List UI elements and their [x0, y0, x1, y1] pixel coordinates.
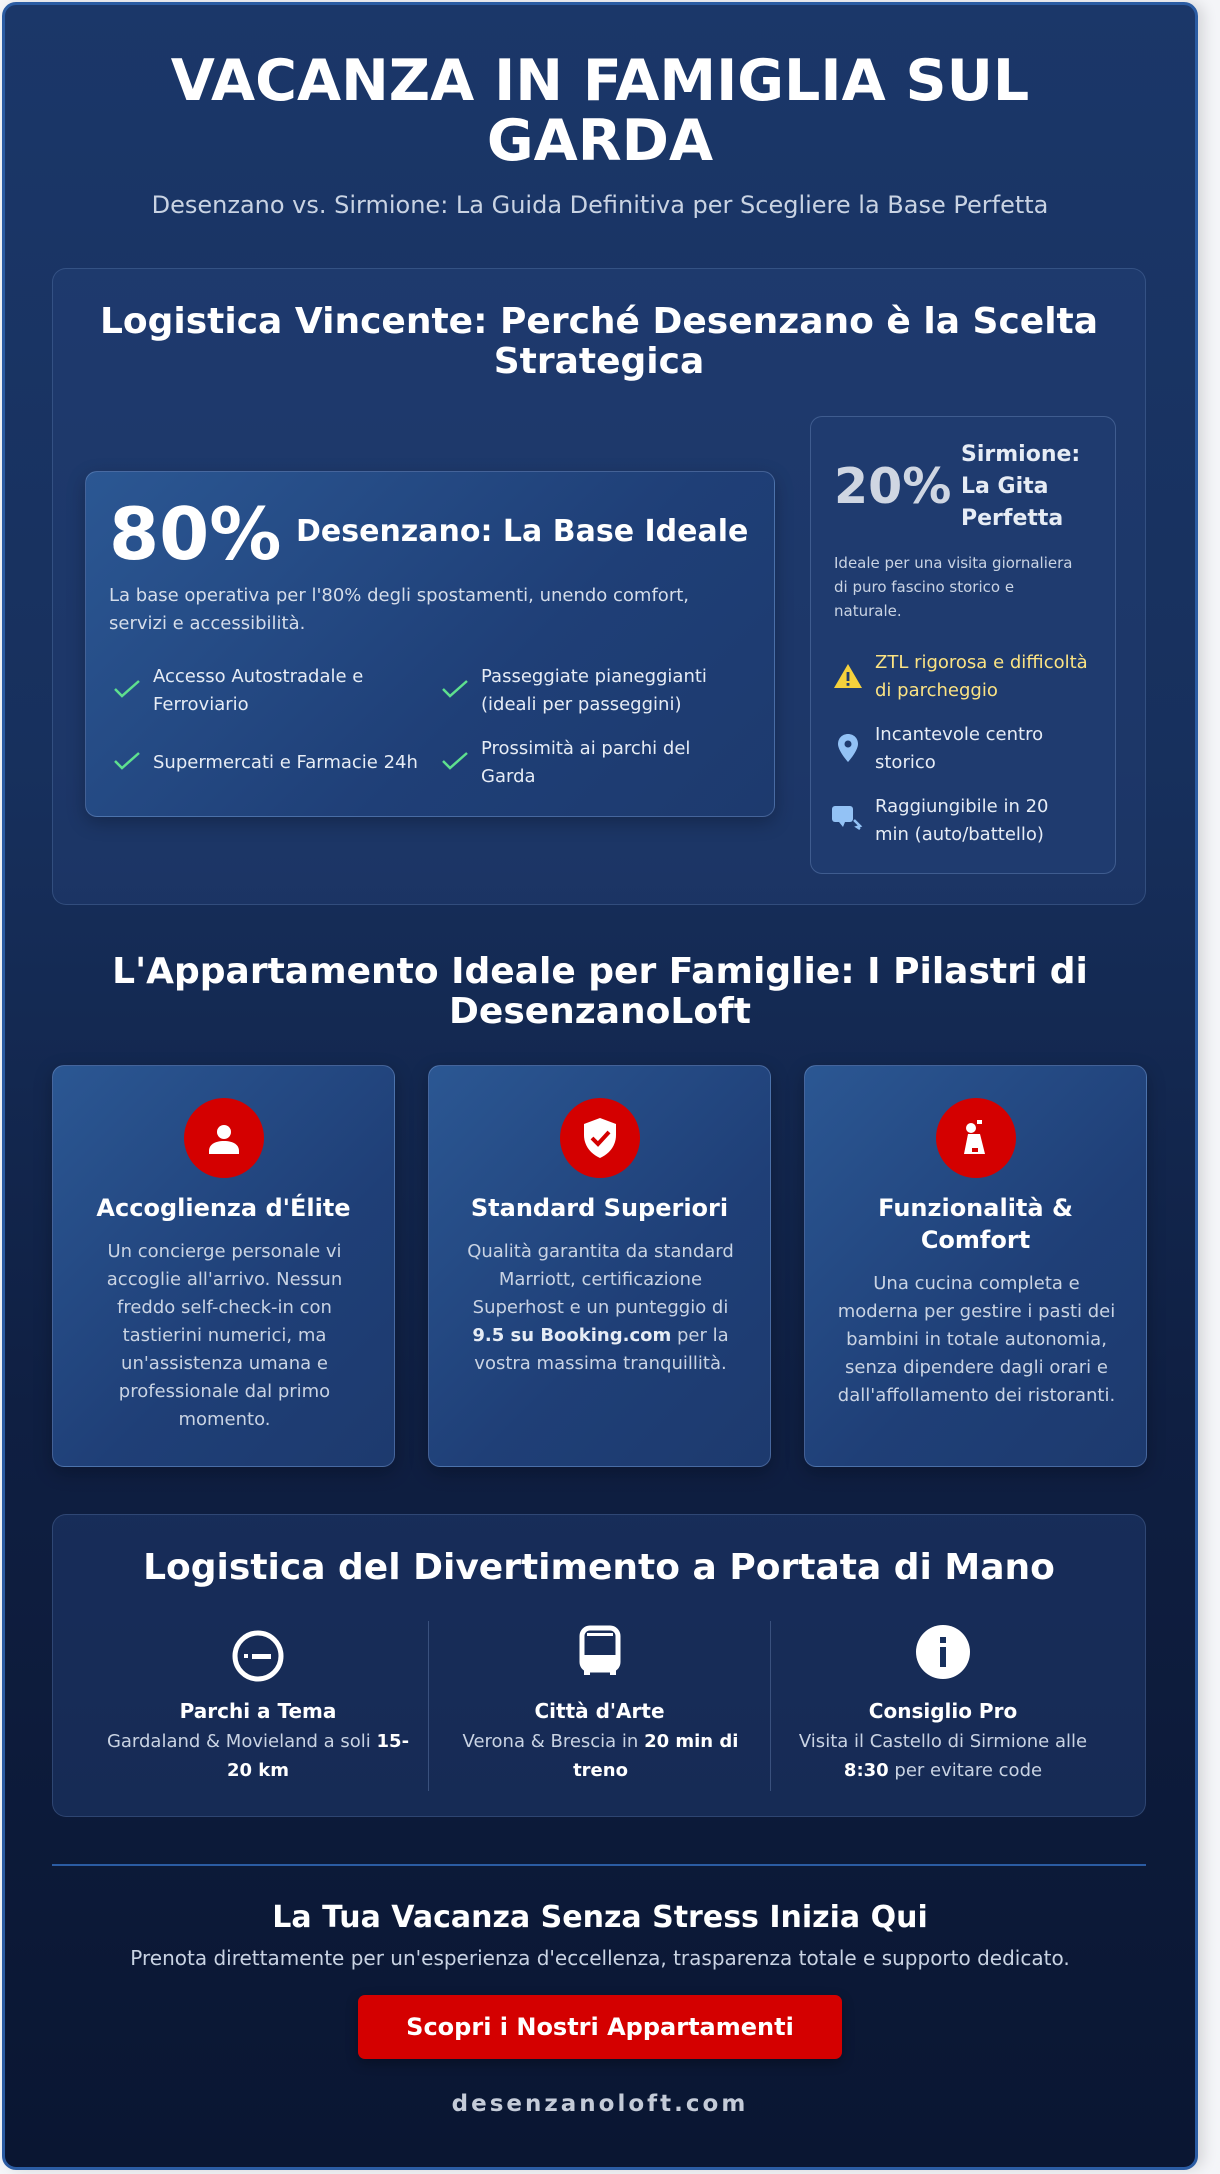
icon: train	[580, 1626, 620, 1675]
card: standard superiori	[428, 1065, 771, 1467]
heading: logistica vincente: Strategica	[494, 341, 704, 382]
panel: logistica divertimento	[52, 1514, 1146, 1817]
card text: Un concierge personale vi accoglie all'arrivo. Nessun freddo self-check-in con tastierini numerici, ma un'assistenza umana e professionale dal primo momento.	[107, 1241, 342, 1430]
card: desenzano 80%	[85, 471, 775, 817]
check item 1: Ferroviario	[153, 694, 249, 715]
column: città	[428, 1621, 771, 1791]
item: centro storico: storico	[875, 752, 936, 773]
checklist	[114, 666, 707, 787]
title: VACANZA IN FAMIGLIA SUL	[171, 48, 1029, 114]
item: centro storico: Incantevole centro	[875, 724, 1043, 745]
check item 2: (ideali per passeggini)	[481, 694, 681, 715]
item: ZTL warning	[834, 652, 1088, 701]
heading: pilastri	[112, 951, 1088, 1032]
title: Consiglio Pro	[869, 1699, 1017, 1723]
check item 4	[442, 738, 690, 787]
check item 2	[442, 666, 707, 715]
card title: sirmione	[961, 442, 1080, 531]
item: raggiungibile: Raggiungibile in 20	[875, 796, 1048, 817]
column: consiglio	[799, 1625, 1087, 1781]
CTA text: Prenota direttamente per un'esperienza d'eccellenza, trasparenza totale e supporto dedicato.	[130, 1946, 1070, 1970]
description: servizi e accessibilità.	[109, 613, 305, 634]
title	[171, 48, 1029, 174]
card title: Funzionalità &	[878, 1194, 1073, 1222]
item: centro storico	[838, 724, 1043, 773]
check item 1: Accesso Autostradale e	[153, 666, 363, 687]
list: sirmione points	[832, 652, 1088, 845]
check item 3: Supermercati e Farmacie 24h	[153, 752, 418, 773]
title: Parchi a Tema	[180, 1699, 336, 1723]
card text: Qualità garantita da standard Marriott, certificazione Superhost e un punteggio di 9.5 su Booking.com per la vostra massima tranquillità.	[467, 1241, 734, 1374]
item: raggiungibile: min (auto/battello)	[875, 824, 1044, 845]
card title: Comfort	[921, 1226, 1030, 1254]
footer url: desenzanoloft.com	[452, 2091, 748, 2117]
stat: 80%: 80%	[109, 492, 281, 576]
card title: sirmione: Sirmione:	[961, 442, 1080, 467]
check item 4: Garda	[481, 766, 536, 787]
icon: chef	[936, 1098, 1016, 1178]
stat: 20%: 20%	[834, 458, 951, 515]
icon: park	[232, 1630, 284, 1682]
card: sirmione 20%	[810, 416, 1116, 874]
check item 2: Passeggiate pianeggianti	[481, 666, 707, 687]
check item 1	[114, 666, 363, 715]
check item 4: Prossimità ai parchi del	[481, 738, 690, 759]
panel: logistica vincente	[52, 268, 1146, 905]
icon: person	[184, 1098, 264, 1178]
icon: info	[916, 1625, 970, 1679]
subtitle: Desenzano vs. Sirmione: La Guida Definitiva per Scegliere la Base Perfetta	[152, 191, 1048, 219]
text: Visita il Castello di Sirmione alle 8:30 per evitare code	[799, 1731, 1087, 1781]
card title: sirmione: Perfetta	[961, 506, 1063, 531]
heading: logistica vincente	[100, 301, 1098, 382]
card title	[878, 1194, 1073, 1254]
column: parchi	[107, 1630, 409, 1781]
description: Ideale per una visita giornaliera di puro fascino storico e naturale.	[834, 554, 1072, 620]
card title: Standard Superiori	[471, 1194, 728, 1222]
text: Gardaland & Movieland a soli 15-20 km	[107, 1731, 409, 1781]
description	[109, 585, 689, 634]
item: raggiungibile	[832, 796, 1048, 845]
CTA button	[358, 1995, 842, 2059]
heading: pilastri: DesenzanoLoft	[449, 991, 751, 1032]
card: funzionalità	[804, 1065, 1147, 1467]
card title: Accoglienza d'Élite	[96, 1194, 351, 1222]
icon: shield	[560, 1098, 640, 1178]
CTA button: Scopri i Nostri Appartamenti	[406, 2013, 794, 2041]
card title: desenzano: Desenzano: La Base Ideale	[296, 514, 748, 549]
card title: sirmione: La Gita	[961, 474, 1048, 499]
heading: Logistica del Divertimento a Portata di Mano	[143, 1547, 1055, 1588]
heading: logistica vincente: Logistica Vincente: Perché Desenzano è la Scelta	[100, 301, 1098, 342]
heading: pilastri: L'Appartamento Ideale per Famiglie: I Pilastri di	[112, 951, 1088, 992]
card: accoglienza	[52, 1065, 395, 1467]
item: ZTL warning: ZTL rigorosa e difficoltà	[875, 652, 1088, 673]
CTA title: La Tua Vacanza Senza Stress Inizia Qui	[272, 1900, 928, 1935]
title: Città d'Arte	[534, 1699, 665, 1723]
description: La base operativa per l'80% degli spostamenti, unendo comfort,	[109, 585, 689, 606]
card text: Una cucina completa e moderna per gestire i pasti dei bambini in totale autonomia, senza dipendere dagli orari e dall'affollamento dei ristoranti.	[838, 1273, 1115, 1406]
item: ZTL warning: di parcheggio	[875, 680, 998, 701]
title: GARDA	[487, 108, 713, 174]
text: Verona & Brescia in 20 min di treno	[463, 1731, 738, 1781]
